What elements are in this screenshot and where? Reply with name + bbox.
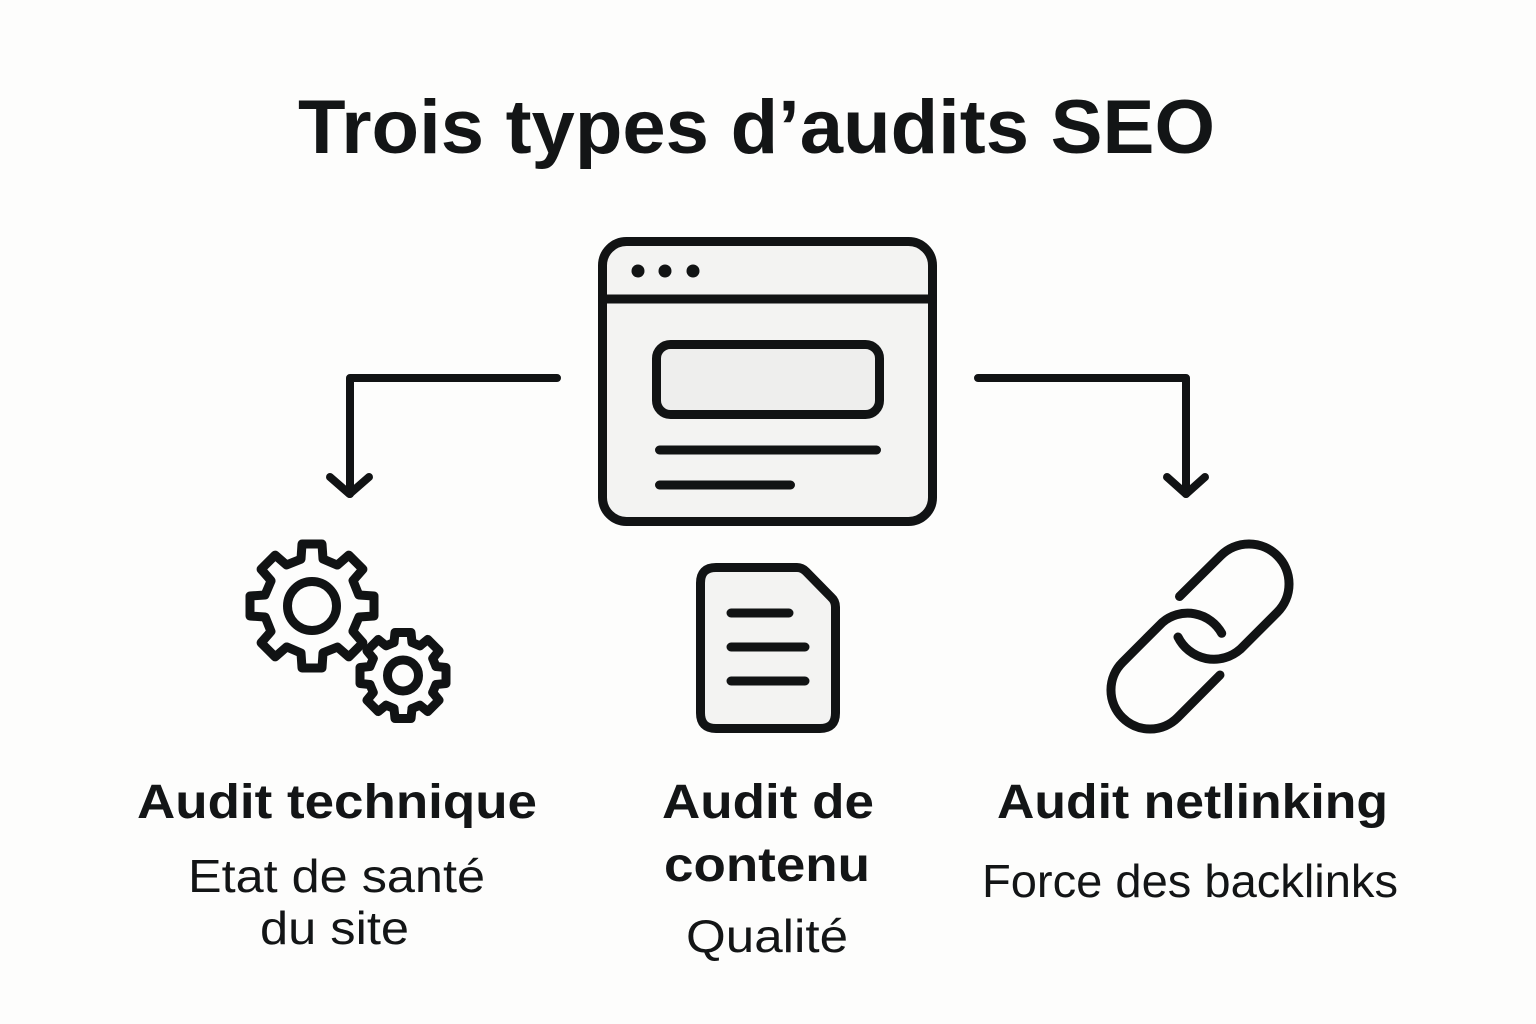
label: netlinking audit: Force des backlinks	[982, 855, 1398, 907]
label: content audit	[662, 776, 874, 962]
label: technical audit: Audit technique	[137, 776, 537, 829]
icon: chain link	[1111, 544, 1289, 729]
label: technical audit: du site	[260, 902, 409, 954]
label: technical audit	[137, 776, 537, 954]
label: netlinking audit: Audit netlinking	[997, 776, 1388, 829]
icon: browser window	[602, 242, 932, 522]
arrow: to netlinking audit	[978, 378, 1205, 494]
label: netlinking audit	[982, 776, 1398, 907]
label: content audit: contenu	[664, 839, 870, 892]
label: technical audit: Etat de santé	[188, 850, 485, 902]
arrow: to technical audit	[330, 378, 557, 494]
label: content audit: Audit de	[662, 776, 874, 829]
title: Trois types d’audits SEO	[298, 85, 1215, 170]
icon: document	[700, 568, 836, 728]
label: content audit: Qualité	[686, 910, 848, 962]
icon: gears	[250, 544, 446, 718]
